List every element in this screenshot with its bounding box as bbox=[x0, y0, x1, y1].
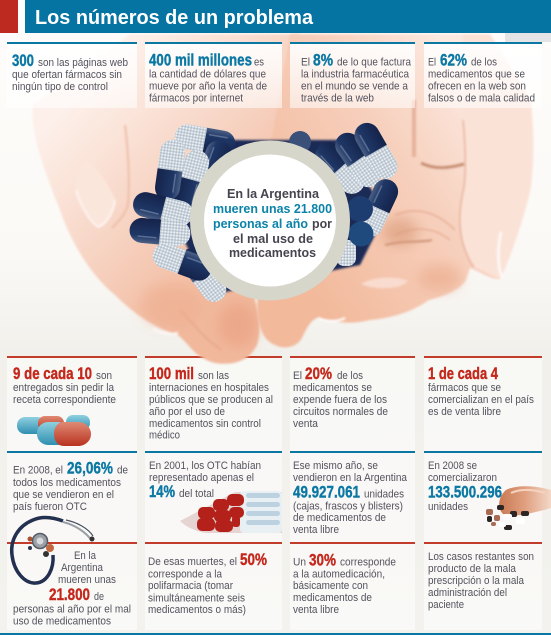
stat: 8% bbox=[313, 50, 333, 70]
text block: que se vendieron en el bbox=[13, 489, 114, 501]
text block: fármacos que se bbox=[428, 382, 501, 394]
panel: row 2 col 1 backing bbox=[7, 358, 137, 451]
text block bbox=[148, 556, 246, 616]
stat: 100 mil bbox=[149, 364, 194, 383]
icon: blister of red pills bbox=[180, 491, 282, 533]
text block: corresponde a la bbox=[148, 568, 223, 580]
text block: personas al año por el mal bbox=[13, 604, 131, 616]
panel: 400 mil millones bbox=[145, 42, 282, 108]
text block: comercializan en el país bbox=[428, 394, 534, 406]
text block bbox=[428, 551, 534, 611]
callout text: personas al año bbox=[213, 216, 308, 231]
text block: En 2001, los OTC habían bbox=[149, 460, 261, 472]
text block: venta libre bbox=[293, 524, 339, 536]
header band with title bbox=[25, 0, 551, 33]
callout text: medicamentos bbox=[229, 245, 316, 260]
callout text: el mal uso de bbox=[233, 231, 313, 246]
header red block bbox=[0, 0, 18, 33]
text block: uso de medicamentos bbox=[13, 616, 111, 628]
text block: representado apenas el bbox=[149, 472, 254, 484]
text block: corresponde bbox=[340, 556, 396, 568]
stat: 14% bbox=[149, 482, 175, 501]
text block: es bbox=[254, 56, 264, 68]
text block: En 2008, el bbox=[13, 464, 63, 476]
panel: 62% bbox=[424, 42, 542, 108]
text block: circuitos normales de bbox=[293, 406, 388, 418]
text block: medicamentos de bbox=[293, 592, 372, 604]
panel: casos restantes bbox=[424, 542, 542, 630]
text block: venta bbox=[293, 418, 319, 430]
text block bbox=[13, 550, 131, 628]
panel: 300 paginas bbox=[7, 42, 137, 108]
text block: en el mundo se vende a bbox=[301, 80, 409, 92]
panel: 133.500.296 bbox=[424, 451, 542, 542]
text block: En la bbox=[74, 550, 97, 562]
text block bbox=[293, 370, 388, 430]
stat: 400 mil millones bbox=[149, 50, 252, 70]
text block: venta libre bbox=[293, 604, 339, 616]
text block bbox=[13, 370, 116, 406]
callout text: En la Argentina bbox=[227, 186, 320, 201]
panel: 1 de cada 4 bbox=[424, 356, 542, 451]
icon: stethoscope bbox=[12, 517, 94, 583]
text block: través de la web bbox=[301, 92, 374, 104]
text block: de medicamentos de bbox=[293, 512, 386, 524]
text block bbox=[149, 460, 261, 500]
icon: spilled pill bottle bbox=[486, 486, 551, 530]
stat: 1 de cada 4 bbox=[428, 364, 498, 383]
text block: expende fuera de los bbox=[293, 394, 387, 406]
text block: de lo que factura bbox=[337, 56, 412, 68]
panel: row 2 col 2 backing bbox=[145, 358, 282, 451]
text block: De esas muertes, el bbox=[148, 556, 237, 568]
text block: El bbox=[301, 56, 310, 68]
text block: El bbox=[293, 370, 302, 382]
text block: mueren unas bbox=[58, 574, 116, 586]
text block: medicamentos o más) bbox=[148, 604, 246, 616]
text block: de bbox=[94, 591, 104, 603]
panel: 49.927.061 bbox=[290, 451, 415, 542]
text block: médico bbox=[149, 430, 180, 442]
stat: 49.927.061 bbox=[293, 482, 360, 502]
bottom rule bbox=[0, 633, 551, 635]
stat: 50% bbox=[240, 550, 267, 569]
divider: red rule col 2 bbox=[145, 356, 282, 358]
stat: 26,06% bbox=[67, 458, 113, 478]
stat: 21.800 bbox=[49, 585, 90, 604]
stat: 62% bbox=[440, 50, 467, 70]
header band with title: Los números de un problema bbox=[35, 7, 314, 29]
panel: 26,06% bbox=[7, 451, 137, 542]
text block bbox=[149, 370, 273, 442]
text block: medicamentos sin control bbox=[149, 418, 261, 430]
panel: 9 de cada 10 bbox=[13, 364, 116, 446]
text block: fármacos por internet bbox=[149, 92, 243, 104]
text block: ofrecen en la web son bbox=[428, 80, 526, 92]
text block: de los bbox=[337, 370, 363, 382]
text block: En 2008 se bbox=[428, 460, 477, 472]
text block: (cajas, frascos y blisters) bbox=[293, 500, 403, 512]
text block: a la automedicación, bbox=[293, 568, 385, 580]
text block: públicos que se producen al bbox=[149, 394, 273, 406]
text block: receta correspondiente bbox=[13, 394, 116, 406]
panel: 20% bbox=[290, 356, 415, 451]
header shadow corner bbox=[505, 33, 551, 42]
text block: simultáneamente seis bbox=[148, 592, 245, 604]
text block: comercializaron bbox=[428, 472, 497, 484]
text block bbox=[301, 56, 412, 104]
text block: unidades bbox=[364, 488, 404, 500]
text block bbox=[293, 556, 396, 616]
stat: 9 de cada 10 bbox=[13, 364, 92, 383]
text block: país fueron OTC bbox=[13, 501, 87, 513]
text block: de bbox=[117, 464, 128, 476]
illustration: hands holding capsules bbox=[32, 34, 533, 364]
panel: 8% bbox=[290, 42, 415, 108]
text block: vendieron en la Argentina bbox=[293, 472, 408, 484]
text block: que ofertan fármacos sin bbox=[12, 69, 122, 81]
callout text: mueren unas 21.800 bbox=[213, 201, 332, 216]
text block: del total bbox=[179, 488, 214, 500]
text block: polifarmacia (tomar bbox=[148, 580, 233, 592]
text block: producto de la mala bbox=[428, 563, 517, 575]
text block bbox=[13, 464, 128, 513]
text block: Ese mismo año, se bbox=[293, 460, 378, 472]
text block: son las bbox=[198, 370, 229, 382]
panel: 30% bbox=[290, 542, 415, 630]
text block: internaciones en hospitales bbox=[149, 382, 269, 394]
text block: todos los medicamentos bbox=[13, 477, 121, 489]
text block: administración del bbox=[428, 587, 507, 599]
icon: red and blue capsules bbox=[17, 415, 91, 446]
panel: 100 mil bbox=[149, 364, 273, 442]
panel: 14% bbox=[145, 451, 282, 542]
stat: 133.500.296 bbox=[428, 482, 502, 502]
callout text: por bbox=[312, 216, 332, 231]
text block: falsos o de mala calidad bbox=[428, 92, 535, 104]
divider: red rule col 1 bbox=[7, 356, 137, 358]
text block bbox=[428, 56, 535, 104]
text block bbox=[12, 57, 128, 93]
right hand bbox=[257, 34, 533, 347]
text block: son bbox=[96, 370, 112, 382]
text block: mueve por año la venta de bbox=[149, 80, 267, 92]
text block: paciente bbox=[428, 599, 464, 611]
text block: Argentina bbox=[61, 562, 104, 574]
text block: año por el uso de bbox=[149, 406, 225, 418]
left hand bbox=[32, 34, 300, 364]
text block: entregados sin pedir la bbox=[13, 382, 115, 394]
panel: 50% bbox=[145, 542, 282, 630]
stat: 30% bbox=[309, 550, 336, 570]
callout text bbox=[213, 186, 332, 260]
text block: Un bbox=[293, 556, 306, 568]
panel: 21.800 bbox=[7, 542, 137, 630]
text block: unidades bbox=[428, 501, 468, 513]
capsules bbox=[129, 118, 402, 307]
stat: 300 bbox=[12, 51, 34, 70]
text block: ningún tipo de control bbox=[12, 81, 108, 93]
text block: prescripción o la mala bbox=[428, 575, 525, 587]
text block: básicamente con bbox=[293, 580, 368, 592]
text block: son las páginas web bbox=[38, 57, 128, 69]
text block: la cantidad de dólares que bbox=[149, 68, 266, 80]
central callout circle bbox=[190, 140, 350, 300]
text block bbox=[149, 56, 267, 104]
text block: medicamentos que se bbox=[428, 68, 525, 80]
text block: la industria farmacéutica bbox=[301, 68, 410, 80]
text block: Los casos restantes son bbox=[428, 551, 534, 563]
text block: El bbox=[428, 56, 436, 68]
text block: es de venta libre bbox=[428, 406, 501, 418]
stat: 20% bbox=[305, 364, 332, 383]
text block: medicamentos se bbox=[293, 382, 372, 394]
text block: de los bbox=[471, 56, 497, 68]
text block bbox=[293, 460, 408, 536]
text block bbox=[428, 382, 534, 418]
text block bbox=[428, 460, 497, 513]
